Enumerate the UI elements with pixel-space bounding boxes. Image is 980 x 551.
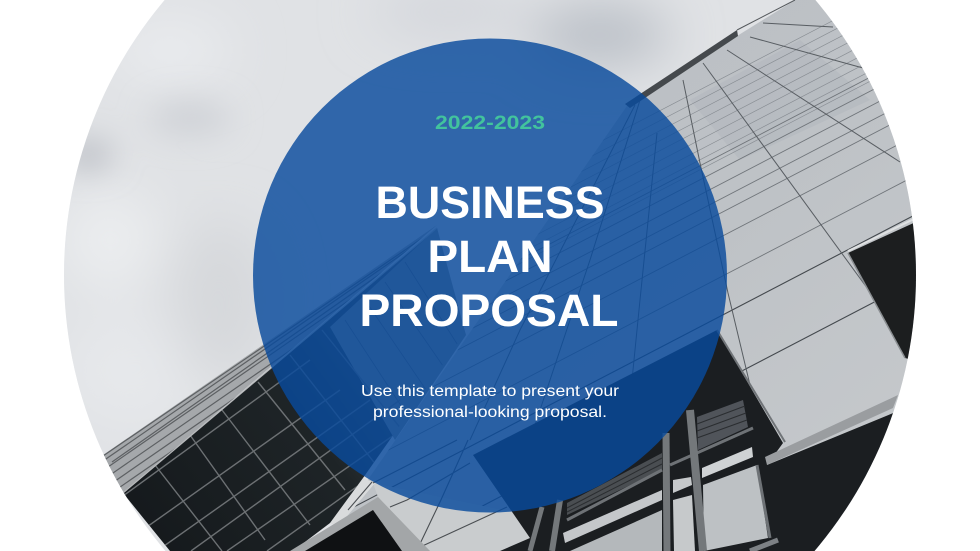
ledge band bbox=[765, 395, 898, 465]
frame bars bbox=[567, 428, 753, 520]
central overhang and lower windows bbox=[473, 330, 925, 551]
mullions bbox=[666, 433, 667, 551]
tower facade bbox=[348, 0, 916, 551]
lower black canopy bbox=[290, 497, 430, 551]
left building bbox=[90, 225, 480, 551]
lower light facade with diagonal lines bbox=[330, 440, 530, 551]
date label: 2022-2023 bbox=[435, 113, 545, 134]
title bbox=[360, 177, 618, 336]
description: Use this template to present your bbox=[361, 383, 620, 400]
description bbox=[361, 383, 620, 421]
louvres bbox=[567, 400, 748, 515]
blue translucent circle bbox=[253, 38, 727, 512]
title: PROPOSAL bbox=[360, 285, 618, 336]
crane on tower top bbox=[625, 0, 795, 108]
sky with clouds bbox=[64, 0, 794, 551]
title: BUSINESS bbox=[376, 177, 604, 228]
window panes bbox=[563, 447, 768, 551]
description: professional-looking proposal. bbox=[373, 404, 607, 421]
upper right black box bbox=[848, 218, 920, 362]
title: PLAN bbox=[428, 231, 552, 282]
